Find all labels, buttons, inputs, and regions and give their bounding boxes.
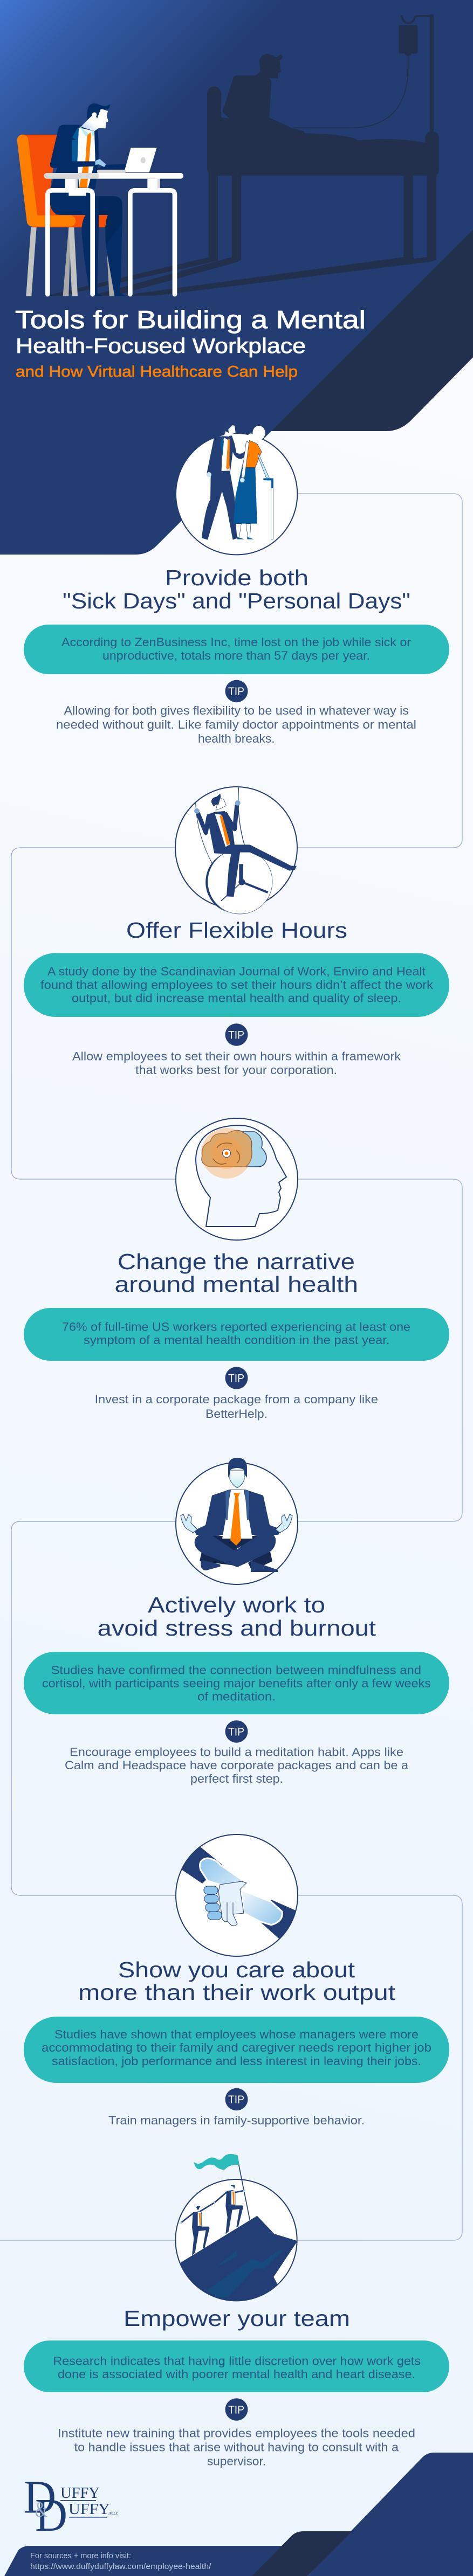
callout pill: found that allowing employees to set their hours didn’t affect the work — [40, 978, 434, 992]
panel: change the narrative — [24, 1118, 449, 1421]
tip text: Institute new training that provides employees the tools needed — [58, 2426, 415, 2440]
callout pill: accommodating to their family and caregiver needs report higher job — [42, 2041, 431, 2054]
tip badge — [225, 1023, 248, 1046]
illustration: hospital bed shadow — [50, 15, 439, 296]
icon: meditating businessman — [176, 1458, 298, 1584]
logo: Duffy & Duffy: D — [35, 2489, 67, 2541]
tip text: to handle issues that arise without having to consult with a — [74, 2441, 399, 2454]
tip text: Allow employees to set their own hours within a framework — [72, 1050, 401, 1063]
heading: "Sick Days" and "Personal Days" — [63, 588, 410, 613]
tip text: Train managers in family-supportive behavior. — [108, 2114, 365, 2127]
logo: Duffy & Duffy: , PLLC — [108, 2512, 118, 2516]
callout pill: 76% of full-time US workers reported experiencing at least one — [62, 1320, 410, 1333]
tip badge: TIP — [228, 1726, 244, 1739]
heading: Provide both — [165, 565, 309, 590]
tip text — [65, 1746, 409, 1785]
tip badge: TIP — [228, 2404, 244, 2416]
connector lines — [0, 494, 462, 2240]
logo: Duffy & Duffy — [24, 2471, 118, 2541]
callout pill: satisfaction, job performance and less interest in leaving their jobs. — [52, 2054, 421, 2068]
header blue panel — [0, 0, 473, 555]
footer dark corner shape — [252, 2531, 352, 2576]
callout pill: Research indicates that having little discretion over how work gets — [53, 2354, 421, 2368]
tip text: Invest in a corporate package from a company like — [95, 1393, 378, 1406]
heading: Change the narrative — [118, 1249, 355, 1274]
heading: Empower your team — [124, 2306, 350, 2331]
panel: flexible hours — [24, 787, 449, 1077]
title: Tools for Building a Mental — [15, 306, 366, 334]
panel: care about more than work output — [24, 1834, 449, 2127]
footer source text: https://www.duffyduffylaw.com/employee-health/ — [30, 2562, 211, 2571]
tip text: Encourage employees to build a meditation habit. Apps like — [70, 1746, 403, 1759]
footer band — [4, 2546, 286, 2576]
callout pill — [24, 2340, 449, 2392]
tip text — [72, 1050, 401, 1077]
heading — [98, 1592, 376, 1640]
callout pill: done is associated with poorer mental health and heart disease. — [58, 2367, 415, 2381]
callout pill: unproductive, totals more than 57 days per year. — [102, 649, 370, 662]
tip text: needed without guilt. Like family doctor appointments or mental — [56, 718, 416, 731]
tip badge — [225, 680, 248, 702]
title — [15, 306, 366, 358]
callout pill — [24, 2017, 449, 2083]
tip text: perfect first step. — [190, 1772, 283, 1785]
icon: climbers with flag on mountain — [175, 2154, 298, 2307]
heading: Actively work to — [148, 1592, 325, 1617]
header dark diagonal band — [216, 230, 473, 431]
tip badge: TIP — [228, 685, 244, 698]
callout pill: output, but did increase mental health and quality of sleep. — [72, 992, 401, 1005]
callout pill: According to ZenBusiness Inc, time lost on the job while sick or — [61, 635, 411, 649]
tip text: Calm and Headspace have corporate packages and can be a — [65, 1758, 409, 1772]
callout pill: A study done by the Scandinavian Journal of Work, Enviro and Healt — [47, 965, 426, 978]
tip badge: TIP — [228, 2094, 244, 2106]
tip text: BetterHelp. — [205, 1407, 268, 1421]
icon: handshake — [176, 1834, 299, 1956]
callout pill — [24, 953, 449, 1017]
logo: Duffy & Duffy: D — [24, 2471, 56, 2523]
tip badge: TIP — [228, 1372, 244, 1385]
title: Health-Focused Workplace — [16, 335, 306, 358]
callout pill: Studies have shown that employees whose managers were more — [54, 2028, 419, 2041]
heading: Offer Flexible Hours — [126, 918, 347, 943]
tip text: that works best for your corporation. — [135, 1063, 337, 1077]
callout pill — [24, 1652, 449, 1714]
tip badge — [225, 1720, 248, 1743]
footer source text: For sources + more info visit: — [30, 2551, 131, 2560]
footer blue corner shape — [307, 2453, 473, 2576]
logo: Duffy & Duffy: & — [35, 2497, 47, 2522]
callout pill — [24, 625, 449, 674]
logo: Duffy & Duffy: UFFY — [68, 2501, 110, 2518]
panel: avoid stress and burnout — [24, 1458, 449, 1785]
logo: Duffy & Duffy: UFFY — [60, 2484, 100, 2502]
panel: sick days and personal days — [24, 421, 449, 745]
callout pill: of meditation. — [197, 1690, 276, 1703]
callout pill: symptom of a mental health condition in the past year. — [84, 1333, 389, 1347]
tip badge — [225, 1367, 248, 1389]
subtitle: and How Virtual Healthcare Can Help — [16, 363, 298, 380]
tip text: supervisor. — [207, 2455, 266, 2468]
tip text — [56, 704, 416, 745]
heading: avoid stress and burnout — [98, 1616, 376, 1640]
tip badge: TIP — [228, 1029, 244, 1041]
tip text: Allowing for both gives flexibility to be used in whatever way is — [64, 704, 409, 717]
tip text — [58, 2426, 415, 2468]
heading — [78, 1957, 396, 2005]
callout pill: Studies have confirmed the connection between mindfulness and — [51, 1663, 421, 1677]
heading: Show you care about — [118, 1957, 355, 1982]
tip text: health breaks. — [198, 732, 275, 745]
icon: man and elderly woman — [176, 421, 297, 555]
panel: empower your team — [24, 2154, 449, 2468]
illustration: businessman at desk — [22, 103, 183, 296]
callout pill: cortisol, with participants seeing major benefits after only a few weeks — [42, 1677, 431, 1690]
heading — [63, 565, 410, 613]
tip text — [95, 1393, 378, 1421]
footer source text — [30, 2551, 211, 2571]
tip badge — [225, 2088, 248, 2110]
icon: head with brain — [176, 1118, 298, 1240]
tip badge — [225, 2398, 248, 2421]
callout pill — [24, 1308, 449, 1361]
icon: man on swing — [175, 787, 297, 914]
heading: more than their work output — [78, 1980, 396, 2005]
heading: around mental health — [114, 1272, 358, 1297]
heading — [114, 1249, 358, 1297]
